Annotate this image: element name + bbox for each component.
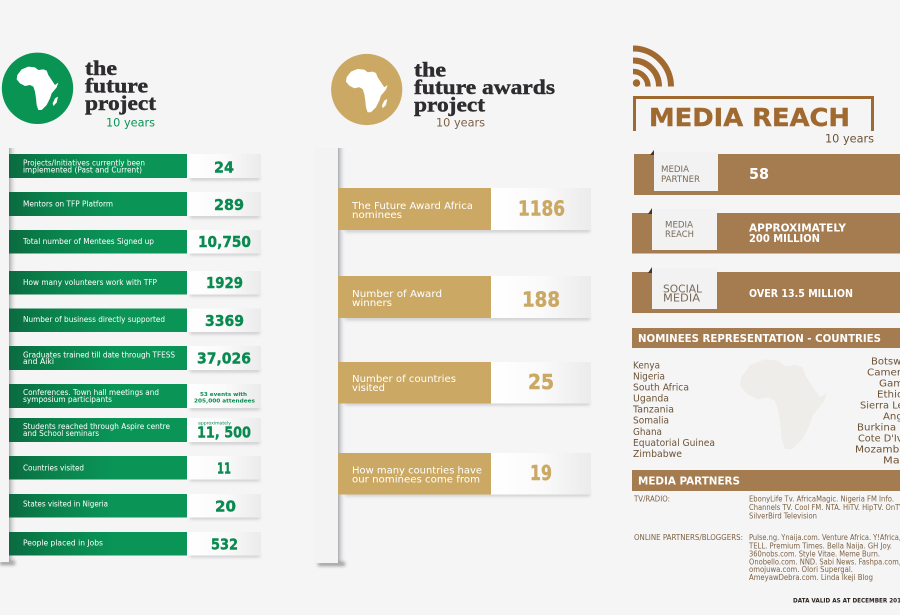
heading: the future project xyxy=(85,56,156,115)
row: states visited: 20 xyxy=(215,498,236,516)
row: students: and School seminars xyxy=(23,429,99,438)
row: people placed: 532 xyxy=(211,536,238,554)
section header: media partners: MEDIA PARTNERS xyxy=(638,474,740,488)
heading: the future awards project: the xyxy=(414,58,446,82)
row: countries visited: 11 xyxy=(217,460,231,478)
heading: the future awards project: future awards xyxy=(414,75,555,99)
list: countries left: Somalia xyxy=(633,416,669,427)
row: projects: Projects/Initiatives currently been xyxy=(23,158,145,168)
row: students xyxy=(9,418,261,444)
row: graduates: and Aiki xyxy=(23,357,54,366)
row: mentees xyxy=(9,230,261,255)
text block: online partners and bloggers: omojuwa.com. Olori Supergal. xyxy=(749,565,853,574)
text block: TV and radio partners xyxy=(633,494,900,520)
heading: the future project: project xyxy=(85,91,156,115)
list: countries left: Equatorial Guinea xyxy=(633,438,715,449)
row: media reach: MEDIA xyxy=(665,220,693,230)
row: nominee countries: 19 xyxy=(530,461,552,485)
row: mentors: Mentors on TFP Platform xyxy=(23,200,113,208)
row: students: Students reached through Aspire centre xyxy=(23,422,170,431)
row: nominee countries: How many countries have xyxy=(352,466,482,476)
side panel strip with shadow xyxy=(314,148,346,566)
row: volunteers xyxy=(9,271,261,296)
section header: media partners xyxy=(632,470,900,491)
row: countries visited xyxy=(338,362,591,405)
row: nominee countries xyxy=(338,453,591,496)
row: graduates: 37,026 xyxy=(197,350,251,368)
row: projects: implemented (Past and Current) xyxy=(23,166,142,174)
section header: nominees representation: NOMINEES REPRESENTATION - COUNTRIES xyxy=(638,332,881,345)
row: countries visited: Countries visited xyxy=(23,464,84,472)
list: countries left: Zimbabwe xyxy=(633,449,682,460)
row: media partner: PARTNER xyxy=(661,175,700,185)
title bracket: media reach: MEDIA REACH xyxy=(649,103,850,132)
row: countries visited xyxy=(9,456,261,481)
row: mentors xyxy=(9,192,261,218)
row: businesses xyxy=(9,308,261,334)
row: social media: SOCIAL xyxy=(663,284,702,296)
row: states visited xyxy=(9,494,261,519)
section header: nominees representation xyxy=(632,328,900,348)
row: social media xyxy=(632,267,900,313)
row: media reach xyxy=(632,208,900,254)
title bracket: media reach xyxy=(634,98,872,132)
heading: the future awards project: project xyxy=(414,93,485,117)
list: countries left: Uganda xyxy=(633,394,669,405)
row: businesses: Number of business directly supported xyxy=(23,315,165,324)
row: mentees: Total number of Mentees Signed up xyxy=(22,237,154,246)
list: countries left: Ghana xyxy=(633,427,662,438)
subheading: 10 years: 10 years xyxy=(825,132,874,146)
row: countries visited: Number of countries xyxy=(352,374,456,385)
row: projects: 24 xyxy=(214,159,234,177)
row: conferences: Conferences. Town hall meetings and xyxy=(23,388,159,397)
row: media partner: 58 xyxy=(749,165,769,183)
panel: the future project xyxy=(0,53,261,565)
map: Africa watermark xyxy=(740,359,827,449)
row: projects xyxy=(9,154,261,180)
icon: broadcast signal xyxy=(633,48,671,87)
row: award winners: Number of Award xyxy=(352,289,442,300)
text block: online partners and bloggers: ONLINE PARTNERS/BLOGGERS: xyxy=(634,533,743,542)
list: countries left: South Africa xyxy=(633,382,689,394)
row: media reach: 200 MILLION xyxy=(749,233,820,245)
row: media reach: APPROXIMATELY xyxy=(749,222,846,234)
row: award winners: winners xyxy=(352,298,392,309)
row: countries visited: visited xyxy=(352,383,385,394)
row: students: approximately xyxy=(198,420,231,426)
list: countries right xyxy=(855,356,900,466)
row: social media: MEDIA xyxy=(663,293,701,305)
side panel strip with shadow xyxy=(0,147,17,565)
row: graduates: Graduates trained till date through TFESS xyxy=(23,350,175,360)
row: conferences: symposium participants xyxy=(23,395,112,404)
heading: the future project: future xyxy=(85,74,148,98)
logo: gold circle with Africa xyxy=(331,54,402,125)
row: award winners xyxy=(338,276,591,320)
row: media reach: REACH xyxy=(665,230,694,240)
row: nominees: nominees xyxy=(352,210,402,221)
list: countries left: Kenya xyxy=(633,360,660,372)
text block: online partners and bloggers: 360nobs.com. Style Vitae. Meme Burn. xyxy=(749,550,880,558)
row: people placed xyxy=(9,532,261,557)
list: countries left: Nigeria xyxy=(633,372,665,382)
row: social media: OVER 13.5 MILLION xyxy=(749,288,853,300)
row: nominees xyxy=(338,188,591,232)
row: volunteers: How many volunteers work with TFP xyxy=(23,278,157,287)
row: conferences xyxy=(9,384,261,410)
text block: online partners and bloggers: AmeyawDebra.com. Linda Ikeji Blog xyxy=(749,573,873,582)
row: award winners: 188 xyxy=(522,288,560,312)
row: media partner: MEDIA xyxy=(661,165,689,175)
row: volunteers: 1929 xyxy=(206,274,243,292)
subheading: 10 years: 10 years xyxy=(106,116,155,130)
list: countries left xyxy=(632,360,715,460)
logo: green circle with Africa xyxy=(2,53,73,124)
row: conferences: 53 events with xyxy=(200,392,247,398)
row: businesses: 3369 xyxy=(205,312,244,330)
row: nominees: 1186 xyxy=(518,196,565,220)
row: states visited: States visited in Nigeria xyxy=(23,500,108,508)
row: nominee countries: our nominees come from xyxy=(352,474,480,486)
row: people placed: People placed in Jobs xyxy=(23,538,103,548)
row: media partner xyxy=(634,150,900,195)
row: mentees: 10,750 xyxy=(198,233,251,251)
heading: the future project: the xyxy=(85,56,117,80)
row: countries visited: 25 xyxy=(528,370,554,394)
text block: TV and radio partners: SilverBird Television xyxy=(749,512,817,520)
row: mentors: 289 xyxy=(214,196,244,214)
panel: the future awards project xyxy=(314,54,591,566)
text block: TV and radio partners: TV/RADIO: xyxy=(633,494,670,504)
panel: media reach xyxy=(632,48,900,604)
text block: online partners and bloggers xyxy=(634,533,900,582)
heading: the future awards project xyxy=(414,58,555,117)
row: students: 11, 500 xyxy=(197,424,251,442)
row: conferences: 205,000 attendees xyxy=(194,398,256,404)
row: graduates xyxy=(9,346,261,372)
subheading: 10 years: 10 years xyxy=(436,116,485,130)
list: countries left: Tanzania xyxy=(632,405,674,416)
row: nominees: The Future Award Africa xyxy=(351,201,473,212)
